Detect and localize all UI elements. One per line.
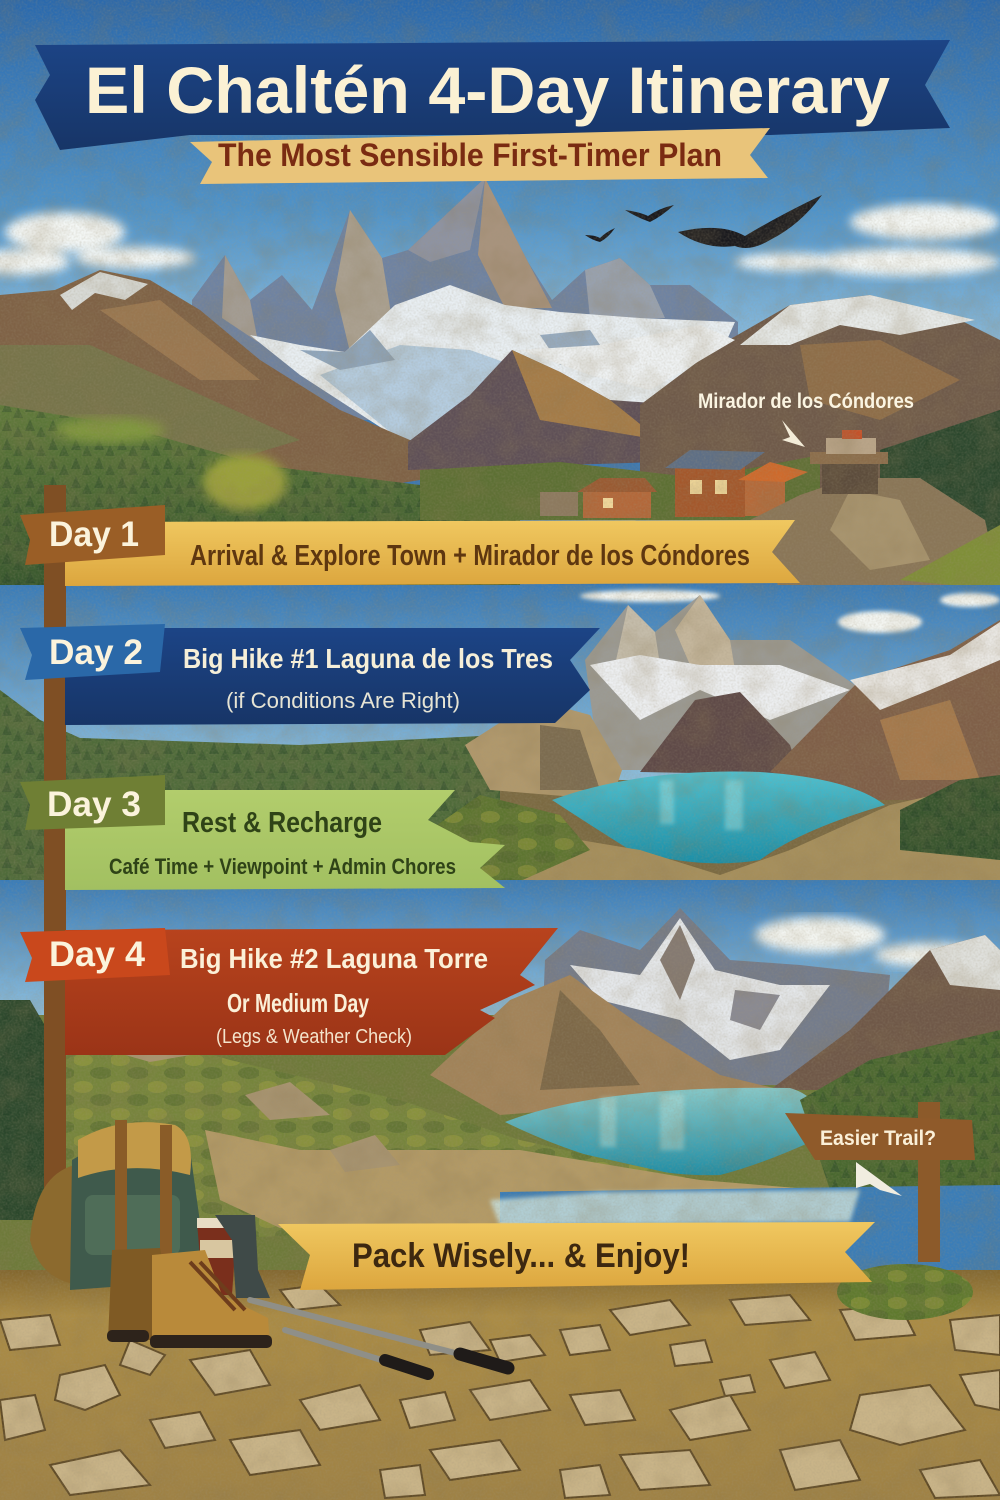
- banner: Day 1: Arrival & Explore Town + Mirador de los Cóndores: [190, 540, 750, 572]
- bush near right sign: [837, 1264, 973, 1320]
- illustration: lower left hills and bushes: [0, 1000, 1000, 1240]
- banner: Day 3: Rest & Recharge: [182, 807, 382, 839]
- icon: mirador tower: [810, 430, 888, 494]
- title banner: El Chaltén 4-Day Itinerary: [85, 53, 890, 127]
- illustration: left hillside day 2: [0, 690, 1000, 890]
- banner: Day 2: Big Hike #1 Laguna de los Tres: [183, 643, 553, 674]
- banner: Day 1: [20, 505, 800, 586]
- illustration: town: [540, 450, 808, 518]
- banner: Day 1: Day 1: [49, 515, 139, 554]
- sign: Easier Trail?: [785, 1102, 975, 1262]
- water strip behind pack banner: [500, 1185, 1000, 1290]
- icon: cup: [197, 1218, 237, 1295]
- label: Mirador de los Cóndores: [698, 390, 914, 447]
- banner: Pack Wisely: Pack Wisely... & Enjoy!: [352, 1237, 690, 1275]
- banner: Day 2: Day 2: [49, 633, 143, 672]
- icon: trekking poles: [250, 1300, 508, 1374]
- banner: Day 4: (Legs & Weather Check): [216, 1026, 412, 1048]
- banner: Day 2: (if Conditions Are Right): [226, 688, 460, 713]
- banner: Day 2: [20, 624, 600, 725]
- icon: hiking boots: [107, 1248, 272, 1348]
- banner: Day 4: [20, 928, 558, 1055]
- illustration: turquoise lake Laguna de los Tres: [552, 772, 885, 863]
- illustration: Day 4 peaks: [430, 908, 1000, 1115]
- title banner: [35, 40, 950, 150]
- banner: Pack Wisely: [278, 1222, 875, 1290]
- panel: day 2 scene band: [0, 585, 1000, 785]
- clouds: [0, 204, 1000, 276]
- panel: sky background: [0, 0, 1000, 420]
- banner: Day 4: Big Hike #2 Laguna Torre: [180, 943, 488, 974]
- foam streak: [490, 1190, 860, 1226]
- banner: Day 3: [20, 775, 505, 890]
- illustration: foreground scree day 3: [430, 775, 1000, 905]
- rocks on ground: [0, 1285, 1000, 1498]
- icon: spare boot: [215, 1215, 270, 1298]
- arrow to mirador: [782, 420, 805, 447]
- banner: Day 4: Day 4: [49, 935, 146, 974]
- condors: [585, 195, 822, 248]
- subtitle banner: The Most Sensible First-Timer Plan: [218, 137, 722, 173]
- illustration: central brown peak: [408, 350, 720, 470]
- illustration: right ridge: [520, 295, 1000, 490]
- illustration: Day 2 peaks: [465, 595, 1000, 800]
- condor small 2: [585, 228, 615, 242]
- illustration: Laguna Torre: [505, 1088, 819, 1175]
- panel: day 4 scene band: [0, 880, 1000, 1020]
- signpost: main post: [44, 485, 66, 1215]
- banner: Day 4: Or Medium Day: [227, 988, 369, 1018]
- base terrain lower: [0, 1015, 1000, 1280]
- sign: Easier Trail?: Easier Trail?: [820, 1127, 936, 1150]
- icon: backpack: [30, 1120, 208, 1290]
- arrow: trail pointer: [856, 1162, 902, 1196]
- label: Mirador de los Cóndores: Mirador de los Cóndores: [698, 390, 914, 413]
- clouds day 4: [755, 917, 985, 967]
- banner: Day 3: Café Time + Viewpoint + Admin Chores: [109, 854, 456, 879]
- subtitle banner: [190, 128, 770, 184]
- banner: Day 3: Day 3: [47, 785, 141, 824]
- condor small 1: [625, 205, 674, 222]
- illustration: left ridge: [0, 270, 480, 500]
- illustration: rocky outcrop: [750, 478, 1000, 590]
- clouds day 2: [580, 590, 1000, 633]
- illustration: forest foothills: [0, 405, 1000, 600]
- illustration: Fitz Roy massif: [192, 178, 738, 440]
- panel: ground: [0, 1270, 1000, 1500]
